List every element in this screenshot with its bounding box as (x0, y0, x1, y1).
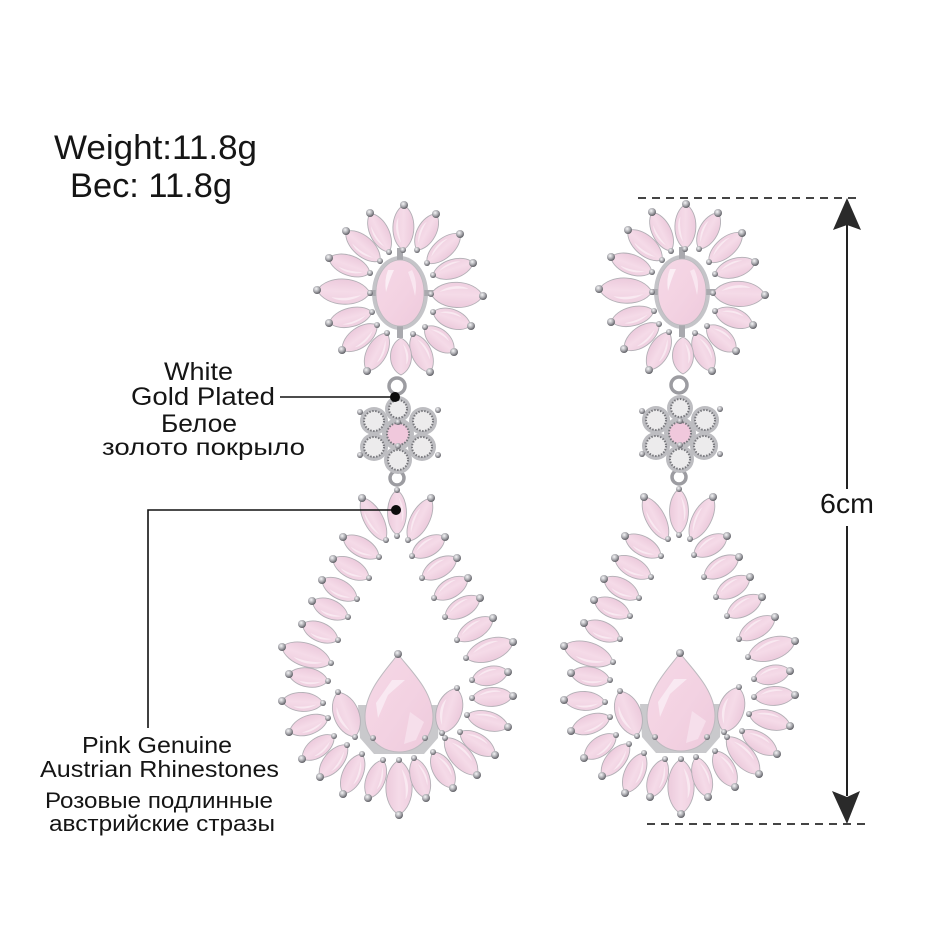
earring: right (560, 200, 799, 818)
earring top three marquise stones (354, 487, 439, 545)
weight text: Вес: 11.8g (70, 167, 232, 205)
callout: pink rhinestones: Розовые подлинные (45, 788, 273, 813)
dimension arrow: 6cm (638, 198, 874, 824)
callout: pink rhinestones: Pink Genuine (82, 732, 232, 758)
callout: pink rhinestones: австрийские стразы (49, 811, 275, 836)
callout: pink rhinestones (40, 505, 401, 836)
earring central pear stone (326, 650, 469, 752)
callout: white gold plated: Белое (161, 410, 237, 438)
earring small crystal flower (357, 396, 441, 474)
weight text: Weight:11.8g (54, 129, 257, 167)
callout: white gold plated: золото покрыло (102, 434, 305, 460)
callout: white gold plated: Gold Plated (131, 383, 275, 411)
earring connector ring (389, 378, 405, 485)
callout: white gold plated (102, 358, 400, 460)
earring top flower stud (313, 201, 487, 376)
dimension arrow: 6cm: 6cm (820, 488, 874, 519)
earring teardrop frame of marquise stones (278, 529, 517, 819)
callout: pink rhinestones: Austrian Rhinestones (40, 756, 279, 782)
callout: white gold plated: White (164, 358, 233, 386)
weight text (54, 129, 257, 205)
earring: left (278, 201, 517, 819)
